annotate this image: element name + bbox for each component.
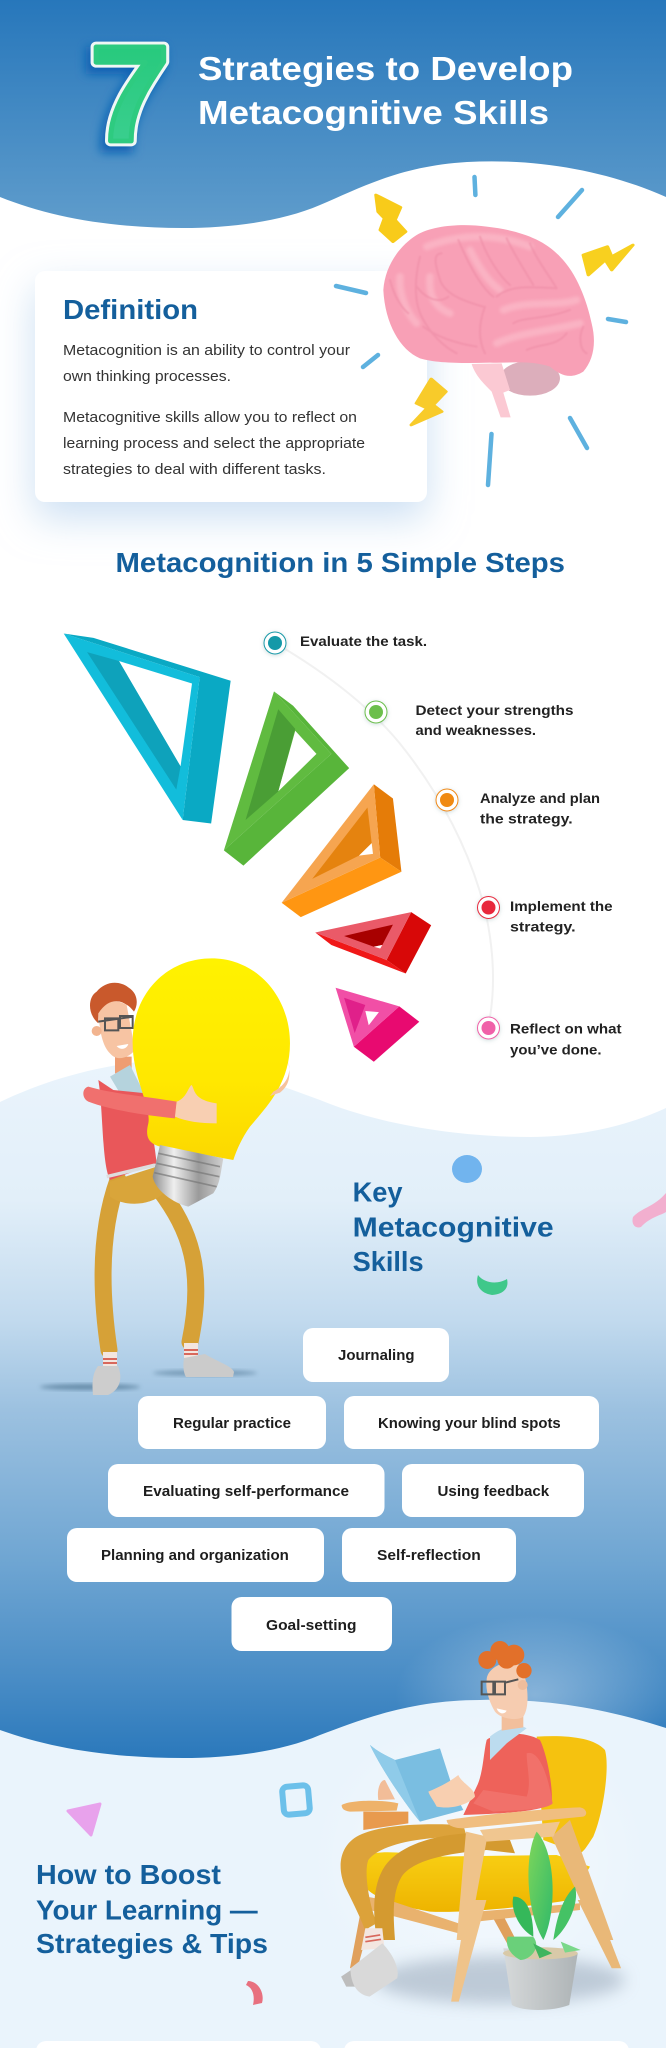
skill: regular practice: [138, 1396, 326, 1449]
bottom card left: [36, 2041, 321, 2048]
title numeral 7: 7: [90, 17, 170, 170]
icon: spark dashes: [336, 177, 626, 485]
triangle: teal: [64, 634, 231, 824]
title: Metacognitive Skills: [198, 94, 549, 131]
definition text: Metacognitive skills allow you to reflect on: [63, 409, 357, 426]
step 3: the strategy.: [480, 810, 573, 826]
triangle: orange: [282, 784, 401, 917]
skill: planning and organization: [67, 1528, 324, 1582]
definition text: own thinking processes.: [63, 368, 231, 385]
title: Strategies to Develop: [198, 50, 573, 87]
heading: definition: Definition: [63, 294, 198, 325]
skill: goal-setting: [232, 1597, 392, 1651]
decor: pink squiggle: [246, 1981, 263, 2005]
skill: journaling: [303, 1328, 449, 1382]
panel: definition: [35, 271, 427, 502]
triangle: green: [224, 691, 349, 866]
title numeral 7: 7: [86, 23, 166, 176]
bottom card right: [344, 2041, 629, 2048]
step 4: [478, 896, 613, 934]
triangle: pink: [336, 988, 419, 1062]
skill: knowing blind spots: [344, 1396, 599, 1449]
step 4: strategy.: [510, 918, 576, 934]
skill: evaluating self-performance: [108, 1464, 384, 1517]
skill: knowing blind spots: Knowing your blind spots: [378, 1415, 561, 1432]
step 5: [478, 1017, 622, 1058]
skill: using feedback: [402, 1464, 584, 1517]
step 3: [436, 789, 600, 826]
skill: planning and organization: Planning and organization: [101, 1547, 289, 1564]
strategies section background: [0, 1700, 666, 2048]
triangle: red: [315, 912, 431, 974]
title numeral 7: 7: [90, 17, 170, 170]
header wave background: [0, 0, 666, 228]
heading: key skills: Key: [353, 1177, 403, 1208]
heading: key skills: [353, 1177, 554, 1277]
illustration: person reading in armchair: [341, 1641, 625, 2010]
step 1: Evaluate the task.: [300, 633, 427, 649]
step 2: [365, 701, 574, 738]
decor: blue square ring: [282, 1785, 310, 1815]
skill: journaling: Journaling: [338, 1347, 414, 1364]
heading: key skills: Metacognitive: [353, 1212, 554, 1243]
head glow: [395, 1615, 666, 1775]
icon: brain: [383, 225, 594, 417]
illustration: person holding light bulb: [40, 958, 290, 1395]
step 3: Analyze and plan: [480, 790, 600, 806]
skill: self-reflection: [342, 1528, 516, 1582]
icon: lightning bolts: [376, 195, 633, 425]
decor: pink squiggle: [632, 1193, 666, 1227]
step 5: you’ve done.: [510, 1042, 602, 1058]
step 2: Detect your strengths: [416, 702, 574, 718]
definition text: learning process and select the appropriate: [63, 435, 365, 452]
heading: how to boost: [36, 1859, 268, 1959]
title: [198, 50, 573, 131]
step 2: and weaknesses.: [416, 722, 536, 738]
skill: self-reflection: Self-reflection: [377, 1547, 481, 1564]
heading: how to boost: Strategies & Tips: [36, 1928, 268, 1959]
timeline arc: [275, 643, 493, 1028]
definition text: [63, 342, 365, 478]
definition text: Metacognition is an ability to control your: [63, 342, 350, 359]
heading: 5 simple steps: Metacognition in 5 Simple Steps: [116, 547, 565, 578]
step 4: Implement the: [510, 898, 613, 914]
heading: how to boost: Your Learning —: [36, 1894, 258, 1925]
reader background glow: [310, 1710, 650, 2010]
skill: goal-setting: Goal-setting: [266, 1617, 356, 1634]
skill: regular practice: Regular practice: [173, 1415, 291, 1432]
skills section background: [0, 1061, 666, 1780]
step 5: Reflect on what: [510, 1020, 622, 1036]
skill: using feedback: Using feedback: [438, 1483, 550, 1500]
decor: green bowl: [477, 1275, 507, 1295]
skill: evaluating self-performance: Evaluating self-performance: [143, 1483, 349, 1500]
heading: how to boost: How to Boost: [36, 1859, 221, 1890]
decor: purple triangle: [68, 1804, 100, 1835]
step 1: [264, 632, 427, 654]
definition text: strategies to deal with different tasks.: [63, 461, 326, 478]
heading: key skills: Skills: [353, 1246, 424, 1277]
decor: blue ball: [452, 1155, 482, 1183]
